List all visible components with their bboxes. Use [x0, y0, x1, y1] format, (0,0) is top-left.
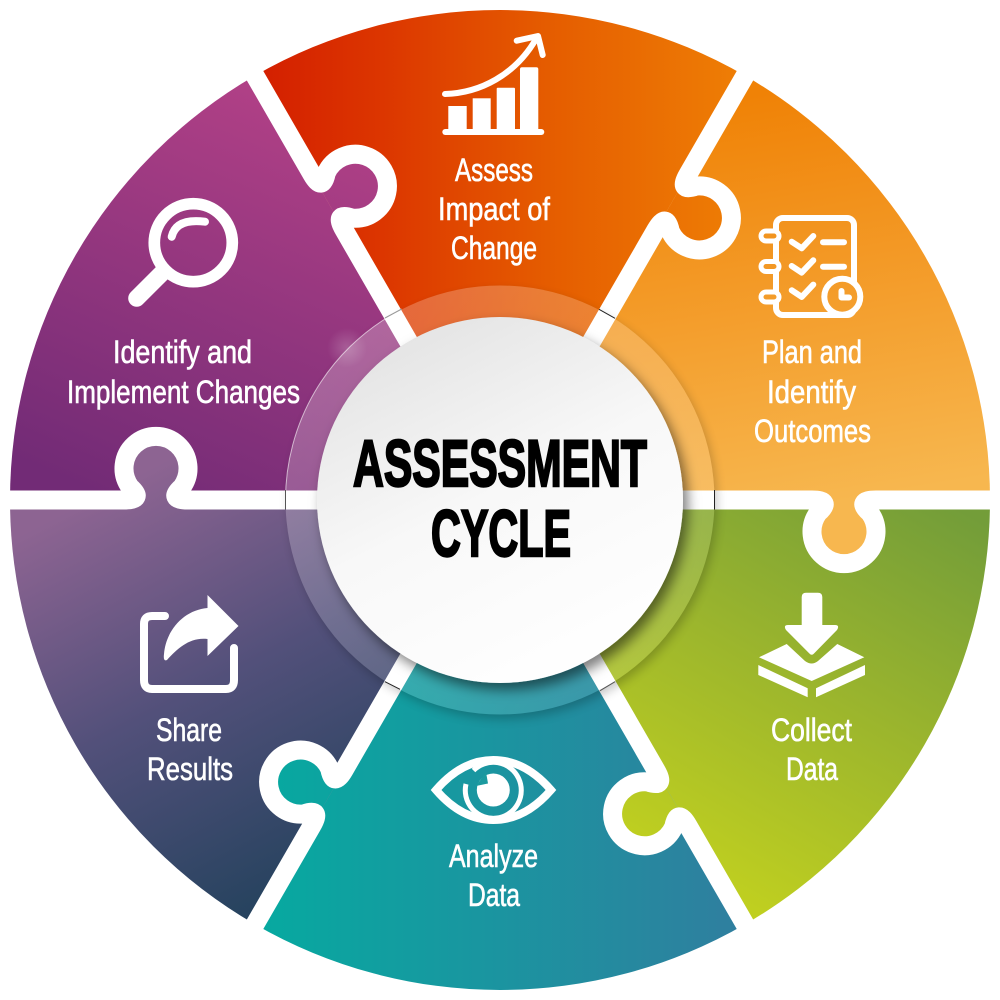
label: collect data: Data [786, 751, 838, 787]
glass ring around hub [286, 286, 717, 719]
label: assess impact of change: Impact of [438, 191, 550, 227]
panel: plan and identify outcomes wedge [500, 76, 990, 500]
panel: assess impact of change wedge [255, 10, 745, 500]
title: assessment cycle [353, 426, 647, 570]
label: analyze data: Analyze [449, 838, 538, 874]
icon: share arrow out of box [144, 595, 238, 689]
label: plan and identify outcomes [754, 334, 871, 449]
icon: magnifying glass [137, 204, 232, 298]
label: identify and implement changes [67, 334, 300, 410]
icon: download into tray [758, 593, 865, 697]
label: assess impact of change: Assess [455, 152, 533, 188]
icon: eye [436, 760, 551, 820]
label: share results [147, 712, 233, 787]
label: identify and implement changes: Implement Changes [67, 374, 300, 410]
label: share results: Share [156, 712, 222, 748]
label: analyze data [449, 838, 538, 913]
icon: rising bar chart [442, 36, 544, 135]
label: share results: Results [147, 751, 233, 787]
title: assessment cycle: ASSESSMENT [353, 426, 647, 500]
panel: analyze data wedge [255, 500, 745, 990]
label: analyze data: Data [468, 877, 520, 913]
label: collect data [771, 712, 852, 787]
label: plan and identify outcomes: Outcomes [754, 413, 871, 449]
title: assessment cycle: CYCLE [431, 496, 571, 570]
puzzle knobs [114, 40, 883, 929]
label: identify and implement changes: Identify and [113, 334, 252, 370]
label: collect data: Collect [771, 712, 852, 748]
label: plan and identify outcomes: Plan and [762, 334, 862, 370]
panel: share results wedge [10, 500, 500, 924]
panel: collect data wedge [500, 500, 990, 924]
center hub disc [317, 317, 683, 683]
label: assess impact of change [438, 152, 550, 266]
label: plan and identify outcomes: Identify [767, 374, 856, 410]
label: assess impact of change: Change [451, 230, 537, 266]
icon: checklist with clock [761, 218, 860, 315]
panel: identify and implement changes wedge [10, 76, 500, 500]
